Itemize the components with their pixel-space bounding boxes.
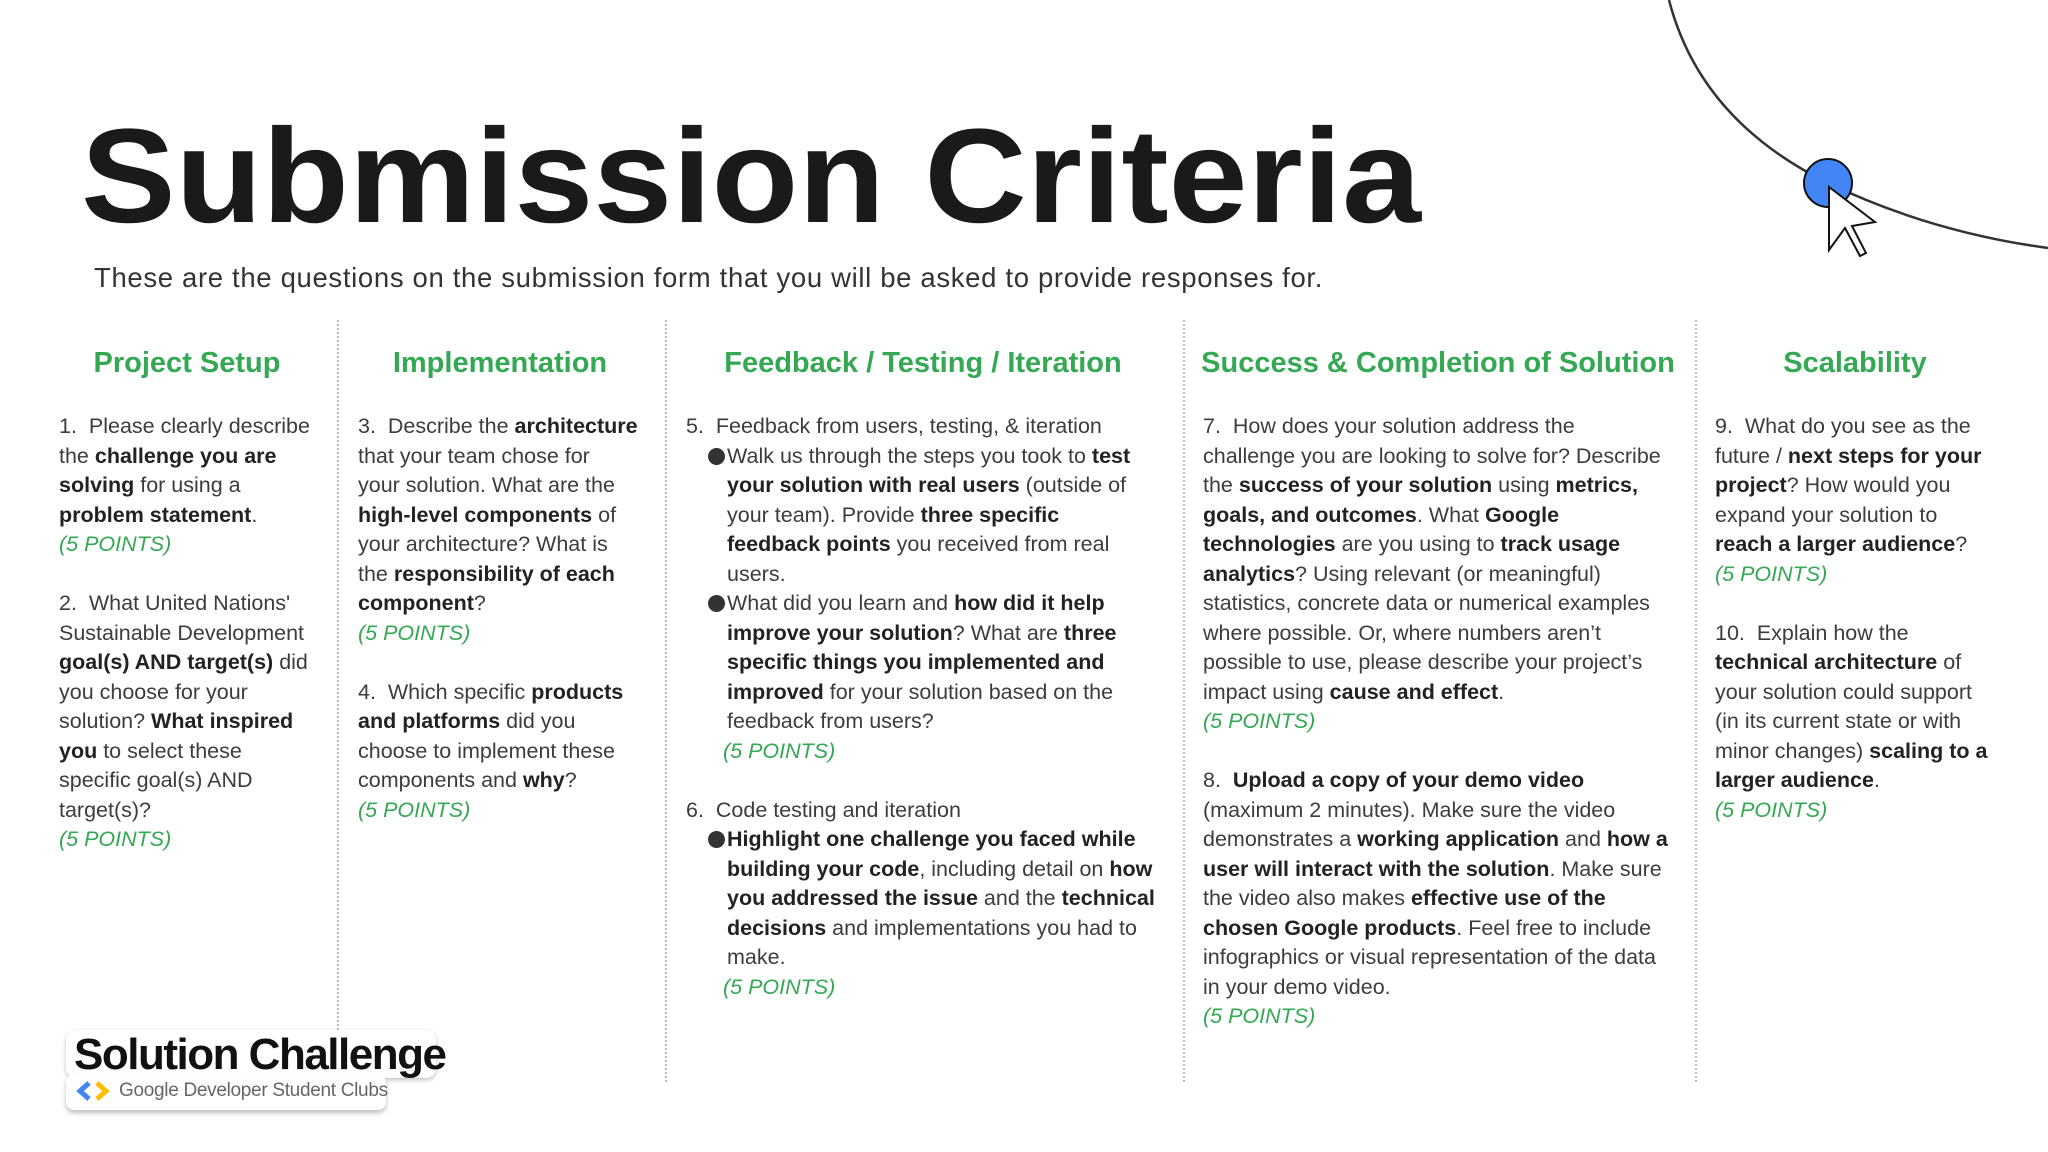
column 4 text — [1203, 414, 1668, 1028]
column 3 text: users. — [727, 562, 786, 586]
column 3 text: your team). Provide three specific — [727, 502, 1059, 526]
heading: Implementation: Implementation — [393, 347, 607, 379]
column 3 text: your solution with real users (outside of — [727, 473, 1126, 497]
column 4 text: in your demo video. — [1203, 974, 1391, 998]
column 5 text: reach a larger audience? — [1715, 532, 1967, 556]
column 5 text: minor changes) scaling to a — [1715, 738, 1987, 762]
column 3 text: building your code, including detail on how — [727, 856, 1152, 880]
column 5 text: (5 POINTS) 10. Explain how the — [1715, 562, 1909, 644]
column 4 text: technologies are you using to track usage — [1203, 532, 1620, 556]
column 5 text: future / next steps for your — [1715, 444, 1981, 468]
column 1 text: goal(s) AND target(s) did — [59, 650, 308, 674]
icon: cursor — [1829, 187, 1875, 256]
column 1 text: specific goal(s) AND — [59, 768, 253, 792]
column 1 text — [59, 414, 310, 851]
column 3 text: make. — [727, 945, 786, 969]
column 4 text: (5 POINTS) 8. Upload a copy of your demo video — [1203, 709, 1584, 792]
column 5 text — [1715, 414, 1988, 822]
column 3 text: Highlight one challenge you faced while — [727, 827, 1136, 851]
column 3 text: feedback points you received from real — [727, 532, 1109, 556]
column 3 text: decisions and implementations you had to — [727, 916, 1137, 940]
column 5 text: project? How would you — [1715, 473, 1950, 497]
column 2 text: that your team chose for — [358, 444, 590, 468]
column 1 text: 1. Please clearly describe — [59, 414, 310, 438]
column 4 text: (5 POINTS) — [1203, 1004, 1315, 1028]
column 2 text: (5 POINTS) — [358, 798, 470, 822]
column 4 text: statistics, concrete data or numerical examples — [1203, 591, 1650, 615]
column 5 text: (in its current state or with — [1715, 709, 1961, 733]
column 4 text: infographics or visual representation of the data — [1203, 945, 1656, 969]
column 1 text: you choose for your — [59, 680, 248, 704]
column 4 text: challenge you are looking to solve for? Describe — [1203, 444, 1661, 468]
column 4 text: possible to use, please describe your project’s — [1203, 650, 1642, 674]
column 3 text: specific things you implemented and — [727, 650, 1105, 674]
column 4 text: demonstrates a working application and how a — [1203, 827, 1668, 851]
column 2 text: and platforms did you — [358, 709, 575, 733]
column 2 text: component? — [358, 591, 486, 615]
column 1 text: solution? What inspired — [59, 709, 293, 733]
column 5 text: technical architecture of — [1715, 650, 1961, 674]
column 2 text: high-level components of — [358, 502, 616, 526]
column 3 text: feedback from users? — [727, 709, 934, 733]
column 5 text: expand your solution to — [1715, 502, 1937, 526]
column 5 text: larger audience. — [1715, 768, 1880, 792]
column 1 text: target(s)? — [59, 798, 151, 822]
column 3 text — [686, 414, 1155, 998]
heading: Success & Completion: Success & Completion of Solution — [1201, 347, 1675, 379]
column 4 text: where possible. Or, where numbers aren’t — [1203, 620, 1601, 644]
column 4 text: (maximum 2 minutes). Make sure the video — [1203, 798, 1615, 822]
column 5 text: 9. What do you see as the — [1715, 414, 1971, 438]
column 2 text: components and why? — [358, 768, 577, 792]
column 5 text: your solution could support — [1715, 680, 1972, 704]
column 4 text: the video also makes effective use of the — [1203, 886, 1606, 910]
column 3 text: you addressed the issue and the technical — [727, 886, 1155, 910]
logo: Solution Challenge — [64, 1030, 446, 1116]
column 4 text: goals, and outcomes. What Google — [1203, 502, 1559, 526]
column 3 text: Walk us through the steps you took to test — [727, 444, 1130, 468]
column 2 text: your architecture? What is — [358, 532, 608, 556]
column 2 text: choose to implement these — [358, 738, 615, 762]
title: Submission Criteria — [81, 102, 1423, 250]
logo: Solution Challenge: Google Developer Student Clubs — [119, 1080, 388, 1101]
column 3 text: What did you learn and how did it help — [727, 591, 1105, 615]
icon: blue dot — [1804, 159, 1852, 207]
subtitle: These are the questions on the submission form that you will be asked to provide responses for. — [94, 262, 1323, 293]
column 2 text — [358, 414, 638, 822]
column 3 text: improved for your solution based on the — [727, 680, 1113, 704]
column 4 text: analytics? Using relevant (or meaningful) — [1203, 562, 1601, 586]
column 2 text: your solution. What are the — [358, 473, 615, 497]
column 3 text: (5 POINTS) — [723, 974, 835, 998]
column 3 text: (5 POINTS) — [723, 738, 835, 762]
heading: Project Setup: Project Setup — [94, 347, 280, 379]
column 3 text: 5. Feedback from users, testing, & iteration 6. Code testing and iteration — [686, 414, 1102, 822]
column 3 text: improve your solution? What are three — [727, 620, 1116, 644]
column 5 text: (5 POINTS) — [1715, 798, 1827, 822]
heading: Scalability: Scalability — [1783, 347, 1927, 379]
column 2 text: (5 POINTS) 4. Which specific products — [358, 620, 623, 704]
column 1 text: problem statement. — [59, 502, 257, 526]
column 4 text: the success of your solution using metrics, — [1203, 473, 1638, 497]
logo: Solution Challenge: Solution Challenge — [74, 1030, 445, 1079]
column 4 text: user will interact with the solution. Make sure — [1203, 856, 1662, 880]
column 4 text: chosen Google products. Feel free to include — [1203, 916, 1651, 940]
column 4 text: impact using cause and effect. — [1203, 680, 1504, 704]
column 2 text: the responsibility of each — [358, 562, 615, 586]
column 1 text: Sustainable Development — [59, 620, 304, 644]
column 1 text: (5 POINTS) — [59, 827, 171, 851]
column 1 text: you to select these — [59, 738, 242, 762]
column 1 text: (5 POINTS) 2. What United Nations' — [59, 532, 290, 615]
column 2 text: 3. Describe the architecture — [358, 414, 638, 438]
column 1 text: the challenge you are — [59, 444, 277, 468]
heading: Feedback / Testing / Iteration: Feedback / Testing / Iteration — [724, 347, 1122, 379]
column 4 text: 7. How does your solution address the — [1203, 414, 1575, 438]
column 1 text: solving for using a — [59, 473, 241, 497]
